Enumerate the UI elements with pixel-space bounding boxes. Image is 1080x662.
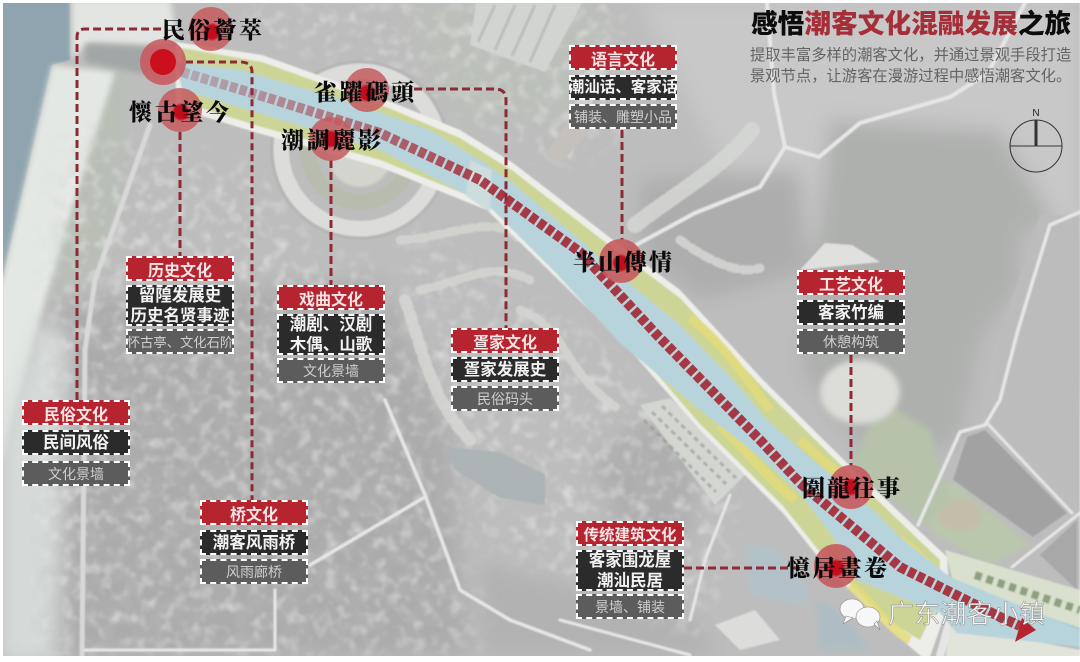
subtitle text: 提取丰富多样的潮客文化，并通过景观手段打造 bbox=[750, 47, 1071, 64]
card: traditional architecture culture: 客家围龙屋 bbox=[589, 552, 671, 570]
card: history culture bbox=[126, 256, 234, 354]
card: folk culture: 民俗文化 bbox=[44, 406, 108, 424]
card: language culture: 潮汕话、客家话 bbox=[569, 78, 677, 96]
card: bridge culture: 潮客风雨桥 bbox=[213, 534, 295, 552]
card: craft culture: 工艺文化 bbox=[819, 276, 883, 294]
card: history culture: 历史文化 bbox=[148, 262, 212, 280]
card: history culture: 怀古亭、文化石阶 bbox=[127, 335, 233, 350]
card: traditional architecture culture: 传统建筑文化 bbox=[583, 526, 676, 544]
start node bbox=[140, 39, 186, 85]
connector: folk culture bbox=[77, 29, 165, 400]
subtitle text: 景观节点，让游客在漫游过程中感悟潮客文化。 bbox=[750, 68, 1071, 85]
card: opera culture: 潮剧、汉剧 bbox=[290, 316, 372, 334]
card: folk culture: 文化景墙 bbox=[48, 466, 104, 482]
card: traditional architecture culture: 景墙、铺装 bbox=[595, 598, 665, 614]
card: Dan culture: 民俗码头 bbox=[477, 390, 533, 406]
card: language culture bbox=[569, 45, 677, 129]
card: Dan culture bbox=[451, 328, 559, 411]
card: history culture: 留隍发展史 bbox=[139, 286, 221, 304]
node: 雀跃码头: 雀躍碼頭 bbox=[314, 74, 416, 107]
card: folk culture bbox=[22, 400, 130, 486]
node: 围龙往事: 圍龍往事 bbox=[802, 470, 900, 503]
node: 怀古望今: 懷古望今 bbox=[129, 94, 229, 127]
route arrow head bbox=[1015, 618, 1036, 642]
card: history culture: 历史名贤事迹 bbox=[130, 306, 230, 324]
connector: traditional architecture bbox=[684, 566, 800, 570]
card: craft culture: 休憩构筑 bbox=[823, 334, 879, 350]
subtitle text bbox=[750, 46, 1071, 85]
connector: bridge culture bbox=[186, 62, 252, 500]
card: language culture: 语言文化 bbox=[591, 52, 655, 68]
node: 民俗荟萃: 民俗薈萃 bbox=[162, 12, 262, 45]
card: language culture: 铺装、雕塑小品 bbox=[574, 108, 672, 124]
connector: Dan culture bbox=[414, 89, 506, 328]
node: 忆居画卷: 憶居畫卷 bbox=[787, 550, 887, 583]
card: opera culture: 木偶、山歌 bbox=[290, 336, 372, 354]
title: 感悟潮客文化混融发展之旅 bbox=[751, 9, 1071, 39]
card: craft culture: 客家竹编 bbox=[818, 304, 884, 322]
card: opera culture: 文化景墙 bbox=[303, 362, 359, 378]
card: bridge culture: 桥文化 bbox=[230, 506, 278, 524]
node: 潮调丽影: 潮調麗影 bbox=[281, 122, 381, 155]
connector: opera culture bbox=[330, 160, 332, 285]
connector: craft culture bbox=[850, 355, 852, 466]
watermark wechat icon bbox=[840, 599, 880, 630]
compass bbox=[1010, 108, 1062, 172]
compass: N bbox=[1032, 108, 1040, 119]
tour route bbox=[182, 72, 1020, 626]
card: traditional architecture culture: 潮汕民居 bbox=[597, 572, 663, 590]
card: craft culture bbox=[797, 270, 905, 354]
card: traditional architecture culture bbox=[576, 521, 684, 619]
card: Dan culture: 疍家发展史 bbox=[464, 360, 546, 378]
card: opera culture bbox=[277, 285, 385, 383]
node: 半山传情: 半山傳情 bbox=[573, 244, 672, 277]
watermark text: 广东潮客小镇 bbox=[888, 599, 1045, 629]
connector: history culture bbox=[178, 132, 182, 256]
card: opera culture: 戏曲文化 bbox=[299, 292, 363, 308]
card: bridge culture bbox=[200, 500, 308, 584]
card: bridge culture: 风雨廊桥 bbox=[226, 564, 282, 580]
card: Dan culture: 疍家文化 bbox=[473, 334, 537, 352]
connector: language culture bbox=[620, 130, 624, 240]
card: folk culture: 民间风俗 bbox=[43, 434, 109, 452]
